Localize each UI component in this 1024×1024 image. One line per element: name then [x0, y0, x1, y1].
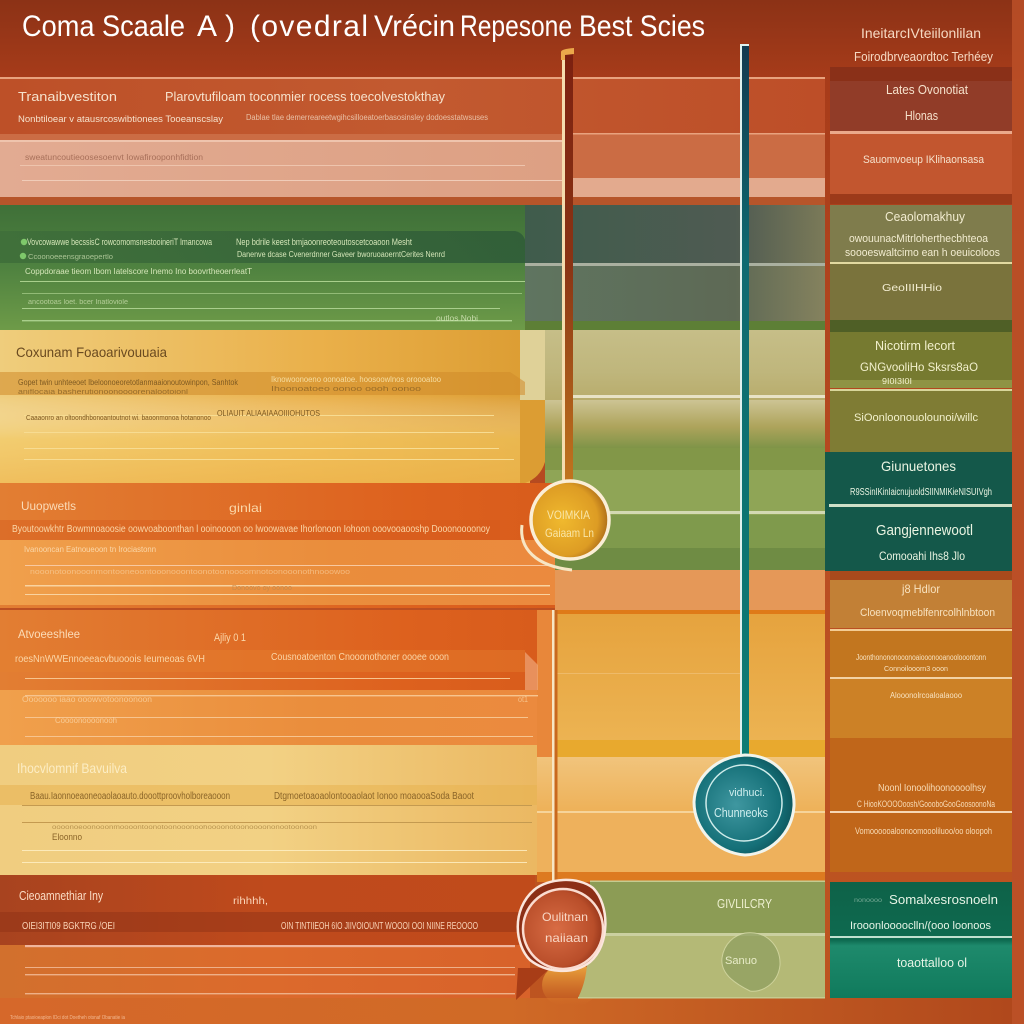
panel text: 9I0I3I0I: [882, 377, 912, 386]
panel text: [863, 82, 985, 166]
panel: right column red: [830, 67, 1012, 204]
panel text: Sauomvoeup IKlihaonsasa: [863, 154, 985, 166]
row text: ancootoas loet. bcer Inatloviole: [28, 299, 128, 306]
panel: amber right column band: [537, 570, 825, 882]
row text: ginlai: [229, 501, 262, 515]
panel text: [855, 783, 995, 836]
row description: Plarovtufiloam toconmier rocess toecolvestokthay: [165, 89, 445, 104]
right column heading: Foirodbrveaordtoc Terhéey: [854, 49, 993, 64]
panel text: SiOonloonouolounoi/willc: [854, 412, 978, 424]
title: A ): [197, 10, 235, 43]
row heading: Uuopwetls: [21, 499, 76, 513]
panel text: soooeswaltcimo ean h oeuicoloos: [845, 247, 1000, 259]
gauge label: Oulitnan: [542, 910, 588, 924]
row text: outlos Nobi: [436, 314, 478, 323]
row text: aniflocaia basherutionoonoooorenalootoionl: [18, 389, 189, 396]
panel: orange row: [0, 483, 555, 608]
row text: [18, 375, 442, 422]
panel: right column olive: [830, 332, 1012, 452]
panel text: Ceaolomakhuy: [885, 209, 965, 224]
row text: Cousnoatoenton Cnooonothoner oooee ooon: [271, 652, 449, 663]
row description: Nonbtiloear v atausrcoswibtionees Tooeanscslay: [18, 114, 224, 124]
row text: Vovcowawwe becssisC rowcomomsnestooineriT Imancowa: [27, 237, 212, 247]
row text: oooonoeoonooonmoooontoonotoonooonoohoooonotoonoooononootoonoon: [52, 825, 317, 831]
gauge label: [542, 910, 588, 945]
row heading: Ihocvlomnif Bavuilva: [17, 760, 127, 776]
gauge label: Chunneoks: [714, 805, 768, 820]
panel text: Joonthonononooonoaiooonooanoolooontonn: [856, 653, 986, 662]
panel text: [850, 892, 998, 970]
row text: Ooooooo iaao ooowvotoonoonoon: [22, 695, 152, 704]
panel: olive-green score bottom: [542, 880, 825, 1005]
row text: OIEI3ITI09 BGKTRG /OEI: [22, 921, 115, 932]
row text: Nep bdrile keest bmjaoonreoteoutoscetcoaoon Mesht: [236, 237, 412, 247]
thermometer: gold tube and bulb: [522, 48, 609, 570]
bottom background strip: [0, 998, 1012, 1024]
row text: OLIAUIT ALIAAIAAOIIIOHUTOS: [217, 409, 320, 418]
panel: pale yellow row: [0, 745, 537, 875]
panel: right column amber-brown: [830, 571, 1012, 738]
panel text: Vomoooooaloonoomoooliluoo/oo oloopoh: [855, 826, 992, 836]
row text: Donoovo oy oonoo: [232, 585, 292, 592]
row text: Ccoonoeeensgraoepertlo: [28, 254, 113, 261]
panel text: Alooonolrcoaloalaooo: [890, 691, 963, 700]
row text: [25, 237, 478, 323]
panel: red eye response row: [0, 77, 825, 205]
gauge label: vidhuci.: [729, 787, 765, 799]
row text: [15, 632, 528, 725]
panel: right column teal: [830, 882, 1012, 998]
panel text: Irooonlooooclln/(ooo loonoos: [850, 920, 991, 932]
row text: Coppdoraae tieom Ibom Iatelscore Inemo Ino boovrtheoerrleatT: [25, 267, 252, 276]
panel text: owouunacMitrloherthecbhteoa: [849, 233, 989, 245]
right column heading: IneitarcIVteiilonlilan: [861, 25, 981, 41]
row heading: Tranaibvestiton: [18, 89, 117, 104]
panel: deep orange row: [0, 610, 555, 757]
blob icon with label: [722, 933, 780, 991]
gauge label: VOIMKIA: [547, 508, 590, 522]
panel: right column olive grey: [830, 205, 1012, 332]
right page edge: [1012, 0, 1024, 1024]
row heading: Coxunam Foaoarivouuaia: [16, 344, 167, 360]
panel: olive right of yellow row: [545, 330, 825, 570]
row text: Caaaonro an oltoondhbonoantoutnot wi. baoonmonoa hotanonoo: [26, 415, 211, 422]
panel text: GNGvooliHo Sksrs8aO: [860, 360, 978, 374]
row text: Dtgmoetoaoaolontooaolaot Ionoo moaooaSoda Baoot: [274, 791, 474, 802]
title: Repesone: [460, 10, 572, 43]
panel text: Connoilooorn3 ooon: [884, 666, 948, 673]
panel: right column brown: [830, 738, 1012, 872]
panel text: [845, 209, 1000, 294]
label: score: GIVLILCRY: [717, 896, 772, 911]
panel: right column dark green: [825, 452, 1012, 571]
row text: Iknowoonoeno oonoatoe. hoosoowlnos oroooatoo: [271, 375, 442, 384]
title: Best Scies: [579, 10, 705, 43]
row heading: Atvoeeshlee: [18, 627, 80, 641]
title: (ovedral: [250, 10, 368, 43]
panel text: [850, 458, 992, 563]
thermometer: teal tube and bulb: [694, 44, 794, 855]
panel text: nonoooo: [854, 898, 883, 904]
panel text: toaottalloo ol: [897, 955, 967, 970]
panel text: Somalxesrosnoeln: [889, 892, 998, 907]
bullet markers: [20, 239, 27, 259]
title: Coma Scaale: [22, 10, 185, 43]
thermometer: red tube and bulb: [518, 610, 605, 971]
panel: brick red row: [0, 875, 550, 1021]
row text: Coooonoooonooh: [55, 716, 117, 725]
panel: green verbal response row: [0, 205, 825, 330]
row text: [22, 896, 478, 932]
row text: Byoutoowkhtr Bowmnoaoosie oowvoaboonthan l ooinoooon oo lwoowavae Ihorlonoon Iohoon ooovooaooshp Dooonoooonoy: [12, 524, 490, 535]
panel text: Gangjennewootl: [876, 522, 973, 539]
row text: Gopet twin unhteeoet Ibeloonoeoretotlanmaaionoutowinpon, Sanhtok: [18, 378, 239, 387]
panel text: Comooahi Ihs8 Jlo: [879, 549, 965, 563]
row heading: Cieoamnethiar Iny: [19, 888, 103, 903]
row text: [30, 791, 474, 842]
panel text: [854, 338, 978, 424]
row text: rihhhh,: [233, 896, 268, 907]
row text: [12, 501, 490, 592]
panel text: Lates Ovonotiat: [886, 82, 968, 97]
row text: Eloonno: [52, 832, 82, 842]
row description: sweatuncoutieoosesoenvt Iowafirooponhfidtion: [25, 153, 203, 162]
row text: roesNnWWEnnoeeacvbuooois Ieumeoas 6VH: [15, 654, 205, 665]
gauge label: [545, 508, 594, 540]
gauge label: Gaiaam Ln: [545, 526, 594, 540]
blob icon with label: Sanuo: [725, 955, 757, 967]
row description: [18, 89, 488, 162]
panel text: Giunuetones: [881, 458, 956, 474]
panel text: Hlonas: [905, 108, 938, 123]
panel text: Nicotirm lecort: [875, 338, 955, 353]
panel text: [856, 582, 995, 700]
row text: nooonotoonooonmontooneoontooonooontoonotoonoooomnotoonooonothnooowoo: [30, 569, 350, 576]
row text: OIN TINTIIEOH 6IO JIIVOIOUNT WOOOI OOI NIINE REOOOO: [281, 921, 478, 932]
row text: Ivanooncan Eatnoueoon tn Irociastonn: [24, 545, 156, 554]
row text: Baau.Iaonnoeaoneoaolaoauto.dooottproovholboreaooon: [30, 791, 230, 802]
row text: Danenve dcase Cvenerdnner Gaveer bworuoaoerntCerites Nenrd: [237, 250, 445, 259]
panel: yellow motor response row: [0, 330, 560, 483]
gauge label: [714, 787, 768, 820]
row text: ot1: [518, 695, 528, 704]
row description: Dablae tlae demerreareetwgihcsilloeatoerbasosinsley dodoesstatwsuses: [246, 113, 488, 122]
row text: Ajliy 0 1: [214, 632, 246, 644]
right column heading: [854, 25, 993, 64]
title: [22, 10, 705, 43]
panel text: Noonl Ionoolihoonoooolhsy: [878, 783, 986, 794]
row text: Ihoonoatoeo oonoo oooh oonoo: [271, 386, 421, 393]
title: Vrécin: [374, 10, 455, 43]
footnote: Tchlaio ptaoioeaplon IDci dot Doetheh otsnaf Obanatie ia: [10, 1015, 125, 1021]
panel text: j8 Hdlor: [901, 582, 940, 596]
panel text: GeoIIIHHio: [882, 283, 943, 294]
panel text: Cloenvoqmeblfenrcolhlnbtoon: [860, 607, 995, 619]
gauge label: naiiaan: [545, 931, 588, 945]
